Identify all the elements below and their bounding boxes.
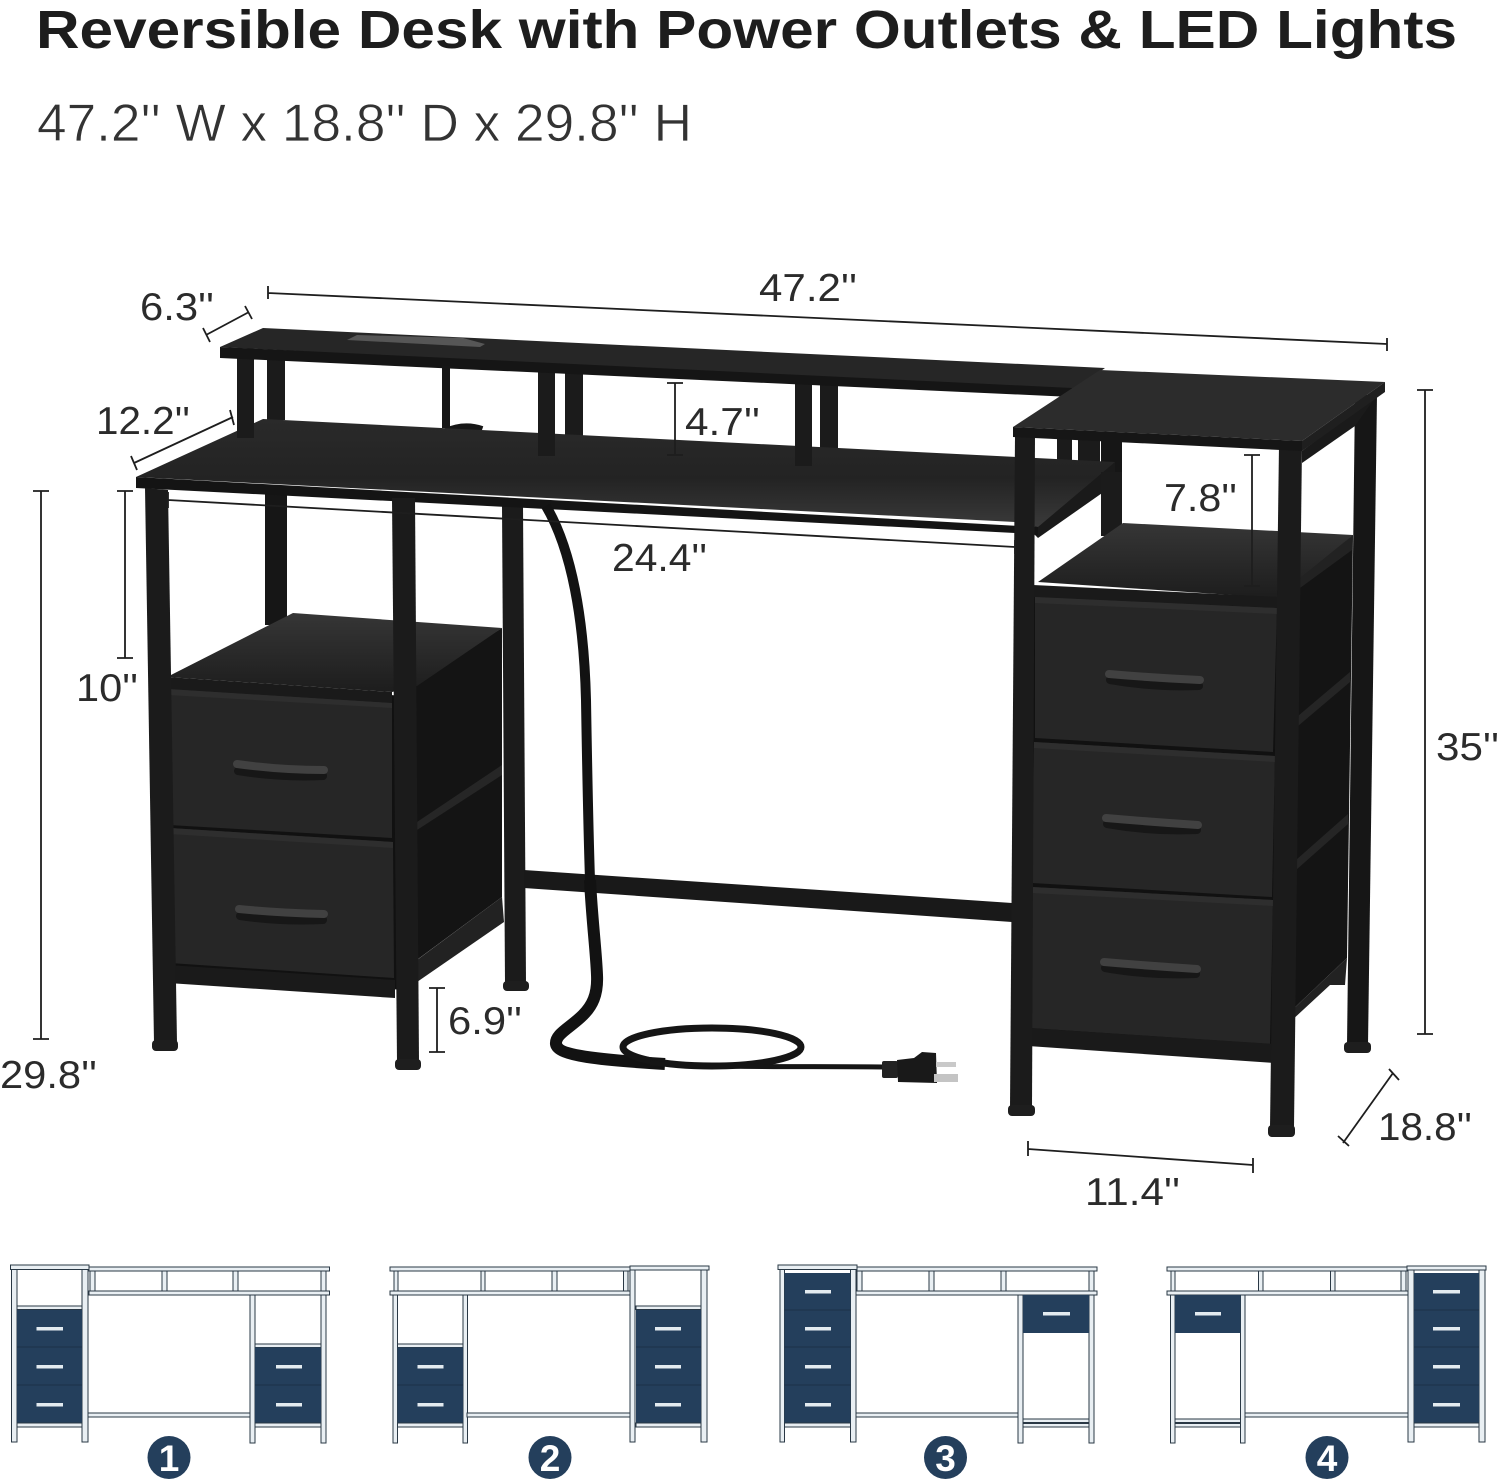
dimension: riser height 4.7 xyxy=(667,383,760,455)
drawer backing xyxy=(1025,590,1285,1050)
dimension: total height 35 xyxy=(1417,390,1499,1034)
back legs left unit xyxy=(265,490,529,991)
dimension: desktop depth 12.2 xyxy=(96,400,234,470)
number badge 1 xyxy=(148,1436,190,1479)
front legs xyxy=(145,488,177,1043)
dimension: drawer unit width 11.4 xyxy=(1028,1141,1253,1214)
configuration 3 xyxy=(778,1265,1097,1479)
dimension: overall depth 18.8: 18.8'' xyxy=(1378,1106,1472,1149)
monitor riser shelf xyxy=(220,328,1105,397)
drawer 1 xyxy=(1035,597,1277,752)
configuration 2 xyxy=(390,1266,709,1479)
dimension: desk height 29.8 xyxy=(0,491,97,1097)
number badge 3 xyxy=(924,1436,967,1479)
lower shelf surface xyxy=(1038,523,1353,598)
number badge 4: 4 xyxy=(1317,1438,1338,1479)
dimension: riser depth 6.3 xyxy=(140,286,252,342)
left drawer unit xyxy=(145,488,504,1070)
drawer 1 xyxy=(168,689,392,838)
dimension: drawer unit width 11.4: 11.4'' xyxy=(1085,1171,1180,1214)
desk illustration xyxy=(136,328,1385,1137)
riser legs front shadow xyxy=(237,400,1122,536)
dimension: knee space width 24.4: 24.4'' xyxy=(612,537,707,580)
number badge 1: 1 xyxy=(159,1438,179,1479)
dimension: clearance 6.9: 6.9'' xyxy=(448,1000,522,1043)
front legs xyxy=(1010,435,1035,1108)
drawer 2 xyxy=(170,828,394,978)
configuration 4 xyxy=(1167,1266,1486,1479)
monitor riser legs xyxy=(237,354,1100,470)
dimension: total height 35: 35'' xyxy=(1436,726,1499,769)
side panel xyxy=(1290,535,1353,1012)
number badge 2: 2 xyxy=(540,1438,560,1479)
plug xyxy=(882,1052,958,1083)
dimension: overall depth 18.8 xyxy=(1338,1069,1472,1149)
side panel xyxy=(410,628,502,965)
under-top beam xyxy=(1302,395,1377,463)
number badge 2 xyxy=(528,1436,572,1479)
bottom crossbar xyxy=(524,870,1012,922)
bottom frame xyxy=(168,965,395,998)
number badge 3: 3 xyxy=(935,1438,956,1479)
shelf surface xyxy=(167,613,502,692)
right drawer unit xyxy=(1008,370,1385,1137)
back legs right unit xyxy=(1101,395,1377,1053)
dimension: left cubby 10: 10'' xyxy=(76,667,138,710)
title: Reversible Desk with Power Outlets & LED Lights xyxy=(36,0,1457,60)
corner top xyxy=(1013,370,1385,451)
dimension: left cubby 10 xyxy=(76,491,138,710)
power cord xyxy=(546,506,958,1083)
dimension: riser depth 6.3: 6.3'' xyxy=(140,286,214,329)
dimension: desk height 29.8: 29.8'' xyxy=(0,1054,97,1097)
drawer backing xyxy=(160,680,405,990)
drawer 3 xyxy=(1030,887,1273,1044)
dimension: clearance 6.9 xyxy=(429,988,522,1052)
power strip xyxy=(347,335,485,347)
dimension: upper cubby 7.8 xyxy=(1164,455,1260,586)
dimension: desktop depth 12.2: 12.2'' xyxy=(96,400,190,443)
bottom frame xyxy=(1028,1028,1274,1063)
dimension: knee space width 24.4 xyxy=(168,492,1015,580)
configuration 1 xyxy=(10,1265,330,1479)
dimension: riser height 4.7: 4.7'' xyxy=(685,401,760,444)
subtitle: overall dimensions: 47.2'' W x 18.8'' D x 29.8'' H xyxy=(37,94,692,153)
number badge 4 xyxy=(1306,1436,1348,1479)
dimension: upper cubby 7.8: 7.8'' xyxy=(1164,477,1237,520)
internal power cord xyxy=(446,366,482,432)
desktop xyxy=(136,419,1115,538)
drawer 2 xyxy=(1032,742,1275,897)
dimension: overall width 47.2 xyxy=(268,267,1387,351)
dimension: overall width 47.2: 47.2'' xyxy=(759,267,857,310)
